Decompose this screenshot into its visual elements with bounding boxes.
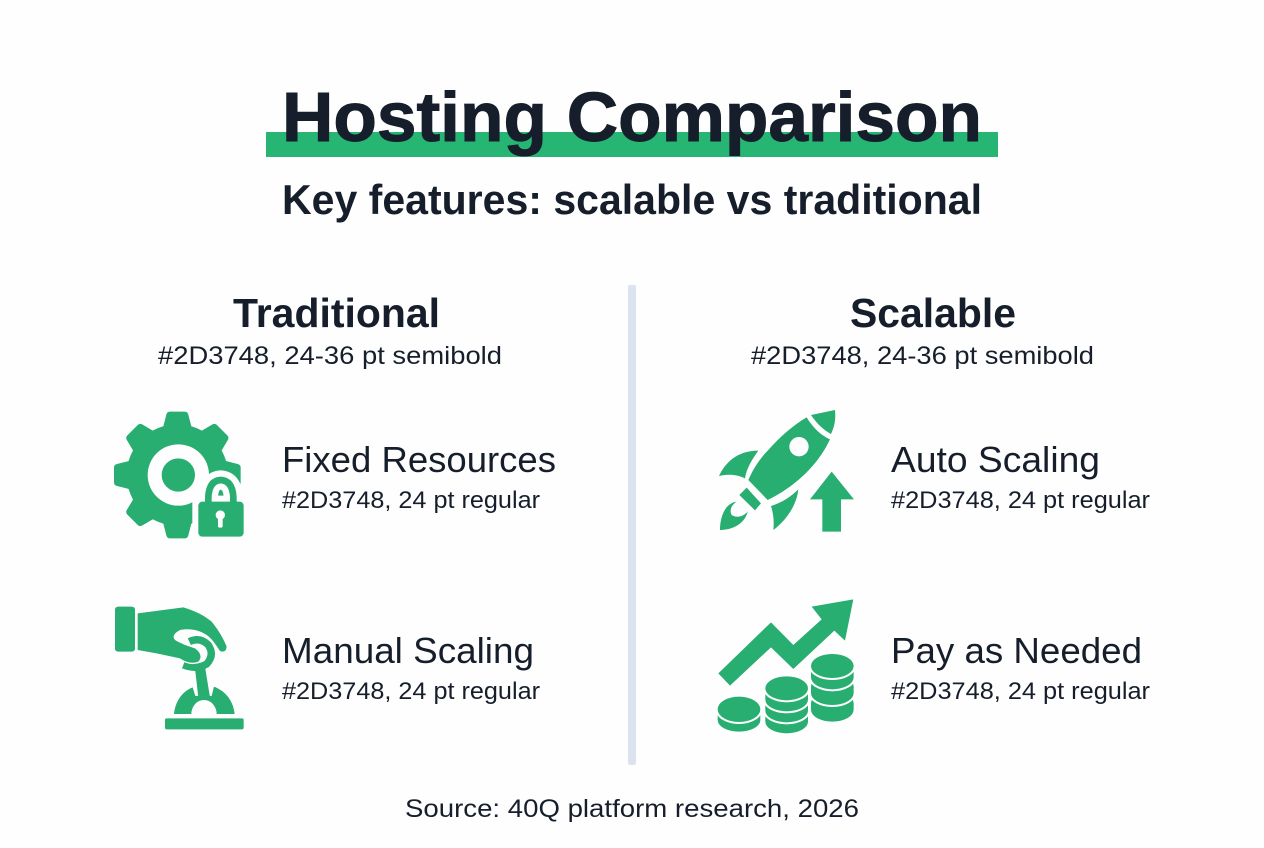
title: Hosting Comparison — [282, 78, 982, 156]
panel: traditional — [114, 290, 556, 729]
traditional style note: #2D3748, 24-36 pt semibold — [158, 342, 502, 370]
source note: Source: 40Q platform research, 2026 — [405, 795, 859, 823]
panel: scalable — [718, 290, 1150, 733]
pay as needed label: Pay as Needed — [891, 630, 1142, 671]
icon: growth arrow and coins — [718, 599, 854, 733]
auto scaling note: #2D3748, 24 pt regular — [891, 487, 1150, 514]
center divider — [628, 285, 636, 765]
icon: gear with padlock — [114, 412, 250, 543]
manual scaling note: #2D3748, 24 pt regular — [282, 678, 540, 705]
scalable heading: Scalable — [850, 290, 1016, 336]
auto scaling label: Auto Scaling — [891, 439, 1100, 480]
subtitle: Key features: scalable vs traditional — [282, 176, 982, 223]
icon: hand on lever — [115, 607, 244, 729]
icon: rocket with up arrow — [719, 410, 854, 532]
scalable style note: #2D3748, 24-36 pt semibold — [751, 342, 1094, 370]
title underline bar — [266, 132, 998, 157]
pay as needed note: #2D3748, 24 pt regular — [891, 678, 1150, 705]
header — [266, 78, 998, 223]
fixed resources label: Fixed Resources — [282, 439, 556, 480]
fixed resources note: #2D3748, 24 pt regular — [282, 487, 540, 514]
traditional heading: Traditional — [233, 290, 440, 336]
manual scaling label: Manual Scaling — [282, 630, 534, 671]
